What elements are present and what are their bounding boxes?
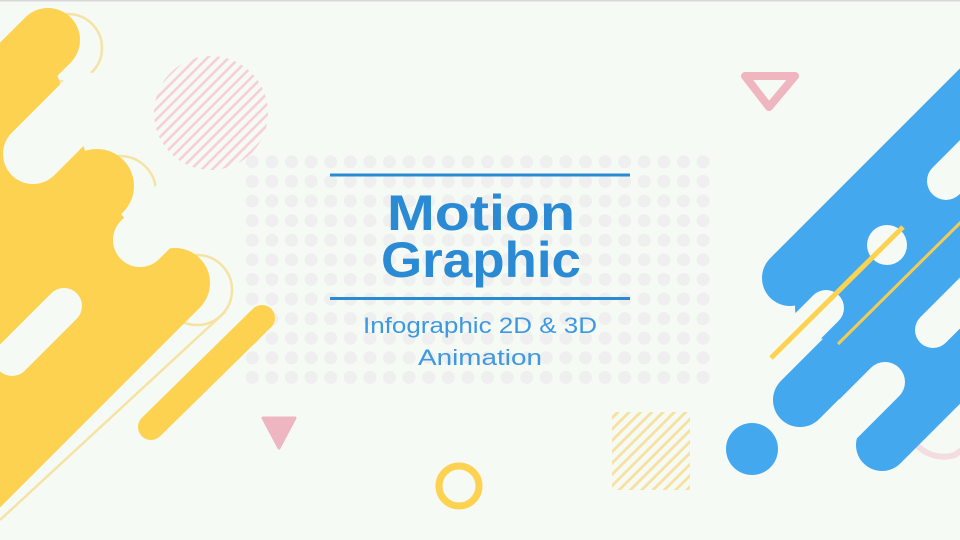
subtitle: Animation bbox=[418, 345, 542, 370]
dot grid bbox=[246, 155, 710, 384]
title: Graphic bbox=[381, 232, 581, 288]
yellow shape outlines bbox=[0, 14, 232, 520]
subtitle bbox=[363, 313, 597, 370]
pink outlined triangle bbox=[745, 76, 795, 107]
title rules bbox=[330, 174, 630, 300]
subtitle: Infographic 2D & 3D bbox=[363, 313, 597, 338]
yellow pill bbox=[151, 318, 262, 427]
yellow ring bbox=[439, 466, 479, 506]
pink ring arcs behind blue bbox=[820, 288, 960, 457]
title bbox=[381, 185, 581, 288]
yellow blob bbox=[0, 40, 185, 540]
striped yellow square bbox=[612, 412, 690, 490]
pink triangle bbox=[263, 418, 295, 448]
blue circle bbox=[726, 423, 778, 475]
title: Motion bbox=[387, 185, 575, 241]
striped pink circle bbox=[154, 56, 268, 170]
yellow lines bbox=[771, 218, 960, 358]
blue shape bbox=[770, 0, 960, 467]
